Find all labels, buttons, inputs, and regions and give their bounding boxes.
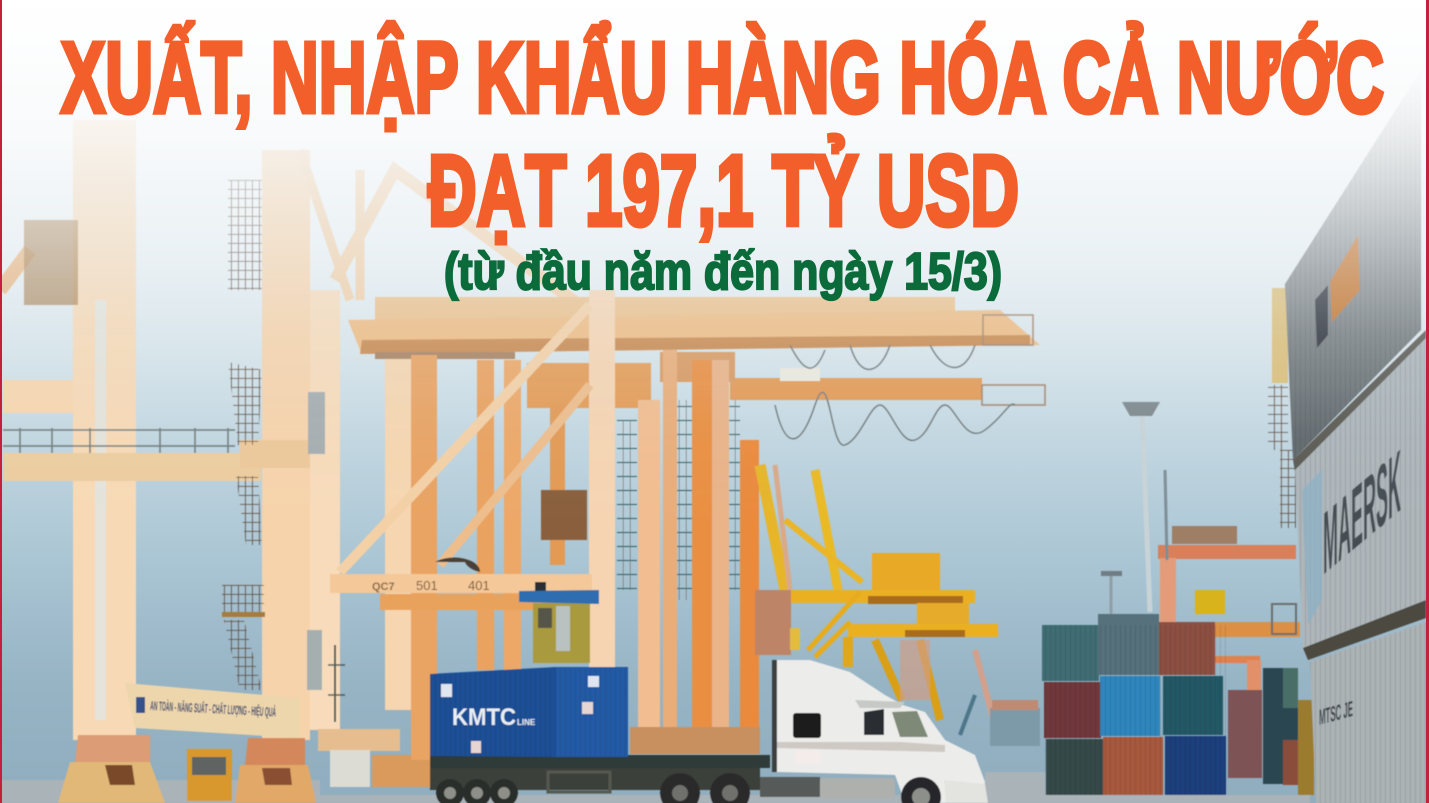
main crane legs and bracing xyxy=(330,290,760,760)
main crane upper beams xyxy=(300,150,1045,445)
right tower stairs xyxy=(1268,288,1296,528)
container stacks xyxy=(1042,614,1314,795)
left crane safety sign beam xyxy=(125,683,300,738)
white truck cab xyxy=(760,660,988,803)
distant gantry crane xyxy=(1158,526,1300,705)
bottom container: MTSC JE xyxy=(1319,696,1353,730)
left crane xyxy=(0,120,411,740)
guard booth xyxy=(519,582,599,663)
distant cranes xyxy=(960,650,1040,746)
top container xyxy=(1285,70,1421,460)
right container stack xyxy=(1285,70,1426,803)
truck flatbed xyxy=(430,755,770,768)
subtitle: (từ đầu năm đến ngày 15/3) xyxy=(444,243,1002,301)
blue container KMTC: KMTC xyxy=(452,704,516,731)
floodlight masts xyxy=(1101,402,1167,625)
title line 2: ĐẠT 197,1 TỶ USD xyxy=(428,135,1019,247)
photo: port scene: AN TOÀN - NĂNG SUẤT - CHẤT LƯỢNG - HIỆU QUẢ xyxy=(150,698,277,720)
main crane legs and bracing: 401 xyxy=(468,578,490,593)
right border xyxy=(1426,0,1429,803)
yellow crane xyxy=(755,465,998,720)
main crane legs and bracing: QC7 xyxy=(372,581,395,593)
middle Maersk container xyxy=(1295,338,1426,648)
bottom container xyxy=(1310,622,1426,803)
blue container KMTC xyxy=(430,667,628,757)
left crane bogies xyxy=(58,729,430,803)
left border xyxy=(0,0,2,803)
blue container KMTC: LINE xyxy=(517,718,536,727)
ground xyxy=(0,772,1310,803)
main crane legs and bracing: 501 xyxy=(416,578,438,593)
truck trailer wheels xyxy=(430,768,760,803)
